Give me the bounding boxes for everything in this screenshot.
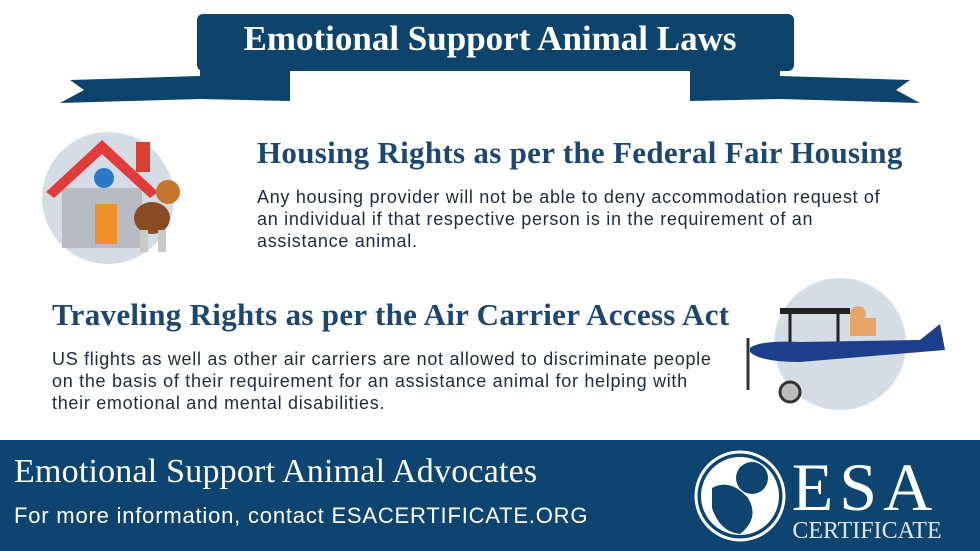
logo: CERTIFICATE bbox=[792, 518, 942, 544]
heading: traveling rights: Traveling Rights as per the Air Carrier Access Act bbox=[52, 297, 729, 332]
text: housing: assistance animal. bbox=[257, 231, 418, 251]
icon: airplane with dog bbox=[746, 278, 945, 410]
icon: house with dog bbox=[42, 132, 180, 264]
text: housing bbox=[257, 187, 880, 251]
text: traveling: US flights as well as other air carriers are not allowed to discriminate people bbox=[52, 349, 712, 369]
logo: ESA bbox=[792, 449, 938, 525]
text: traveling: on the basis of their requirement for an assistance animal for helping with bbox=[52, 371, 688, 391]
footer panel bbox=[0, 440, 980, 551]
footer contact: For more information, contact ESACERTIFICATE.ORG bbox=[14, 503, 588, 528]
heading: housing rights: Housing Rights as per the Federal Fair Housing bbox=[257, 135, 903, 170]
footer heading: Emotional Support Animal Advocates bbox=[14, 453, 537, 490]
logo bbox=[694, 449, 942, 544]
text: housing: an individual if that respective person is in the requirement of an bbox=[257, 209, 813, 229]
title text: Emotional Support Animal Laws bbox=[243, 19, 737, 58]
text: housing: Any housing provider will not be able to deny accommodation request of bbox=[257, 187, 880, 207]
title banner bbox=[60, 14, 920, 103]
text: traveling bbox=[52, 349, 712, 413]
text: traveling: their emotional and mental disabilities. bbox=[52, 393, 385, 413]
